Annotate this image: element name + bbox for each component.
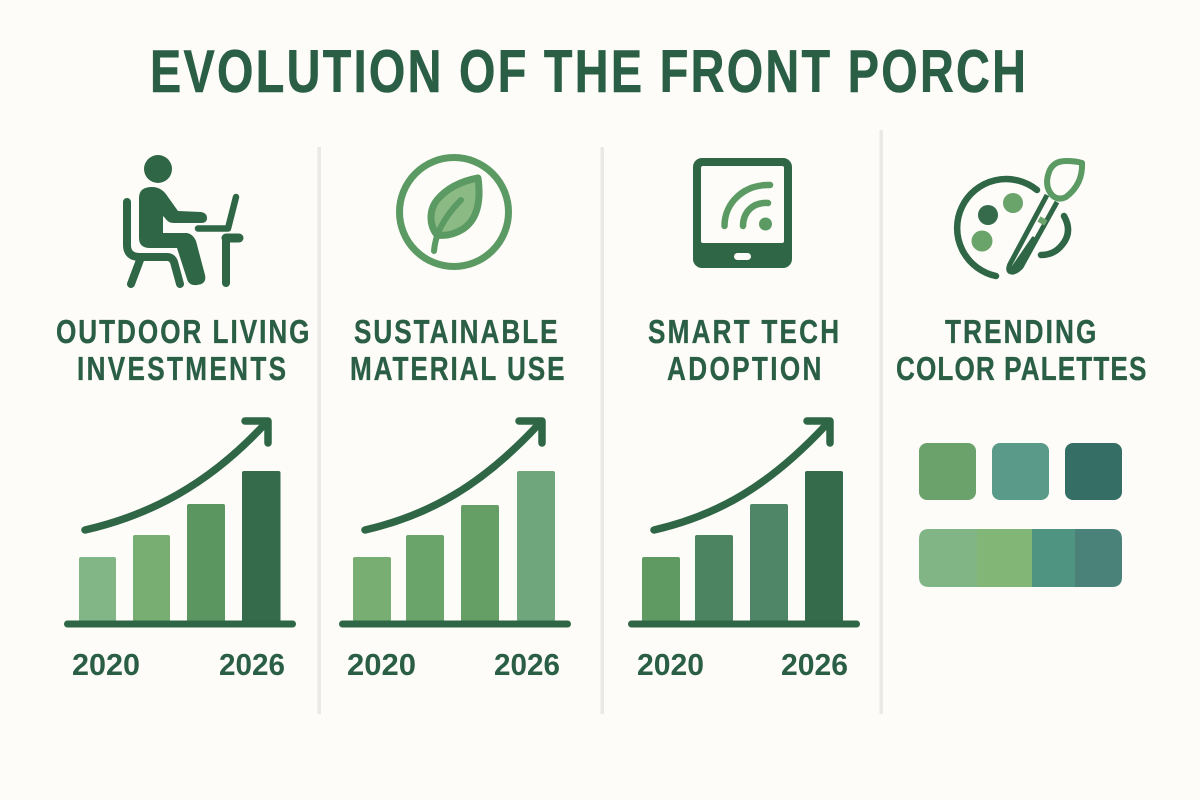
heading: sustainable material use: SUSTAINABLE	[354, 314, 558, 351]
panel: smart tech adoption	[632, 158, 856, 682]
bar chart: sustainable material 2020 to 2026: 2026	[494, 647, 560, 682]
heading: smart tech adoption: SMART TECH	[648, 314, 839, 351]
icon: palette and brush	[957, 161, 1082, 276]
heading: outdoor living investments: OUTDOOR LIVING	[56, 314, 309, 351]
swatches: three color squares	[919, 443, 1122, 500]
arrow: growth trend	[365, 421, 542, 530]
heading: sustainable material use	[350, 314, 564, 388]
palette strip: four blended colors	[919, 529, 1122, 587]
heading: sustainable material use: MATERIAL USE	[350, 351, 564, 388]
heading: outdoor living investments	[56, 314, 310, 388]
icon: tablet with wifi signal	[693, 158, 792, 268]
bar chart: sustainable material 2020 to 2026: 2020	[347, 647, 416, 682]
bar chart: outdoor living 2020 to 2026: 2026	[219, 647, 285, 682]
heading: outdoor living investments: INVESTMENTS	[77, 351, 286, 388]
heading: trending color palettes	[896, 314, 1146, 388]
bar chart: smart tech 2020 to 2026: 2026	[781, 647, 848, 682]
heading: trending color palettes: TRENDING	[945, 314, 1096, 351]
panel: sustainable material use	[342, 158, 568, 682]
bar chart: smart tech 2020 to 2026	[632, 421, 856, 682]
heading: trending color palettes: COLOR PALETTES	[896, 351, 1146, 388]
bar chart: outdoor living 2020 to 2026	[68, 421, 292, 682]
arrow: growth trend	[85, 421, 268, 530]
heading: smart tech adoption: ADOPTION	[667, 351, 821, 388]
icon: person working at laptop	[127, 155, 239, 285]
panel: trending color palettes	[896, 161, 1146, 587]
title: EVOLUTION OF THE FRONT PORCH	[150, 38, 1026, 105]
bar chart: smart tech 2020 to 2026: 2020	[637, 647, 704, 682]
bar chart: outdoor living 2020 to 2026: 2020	[72, 647, 140, 682]
heading: smart tech adoption	[648, 314, 839, 388]
bar chart: sustainable material 2020 to 2026	[342, 421, 568, 682]
icon: leaf in circle	[400, 158, 508, 266]
panel: outdoor living investments	[56, 155, 310, 682]
arrow: growth trend	[654, 421, 830, 530]
